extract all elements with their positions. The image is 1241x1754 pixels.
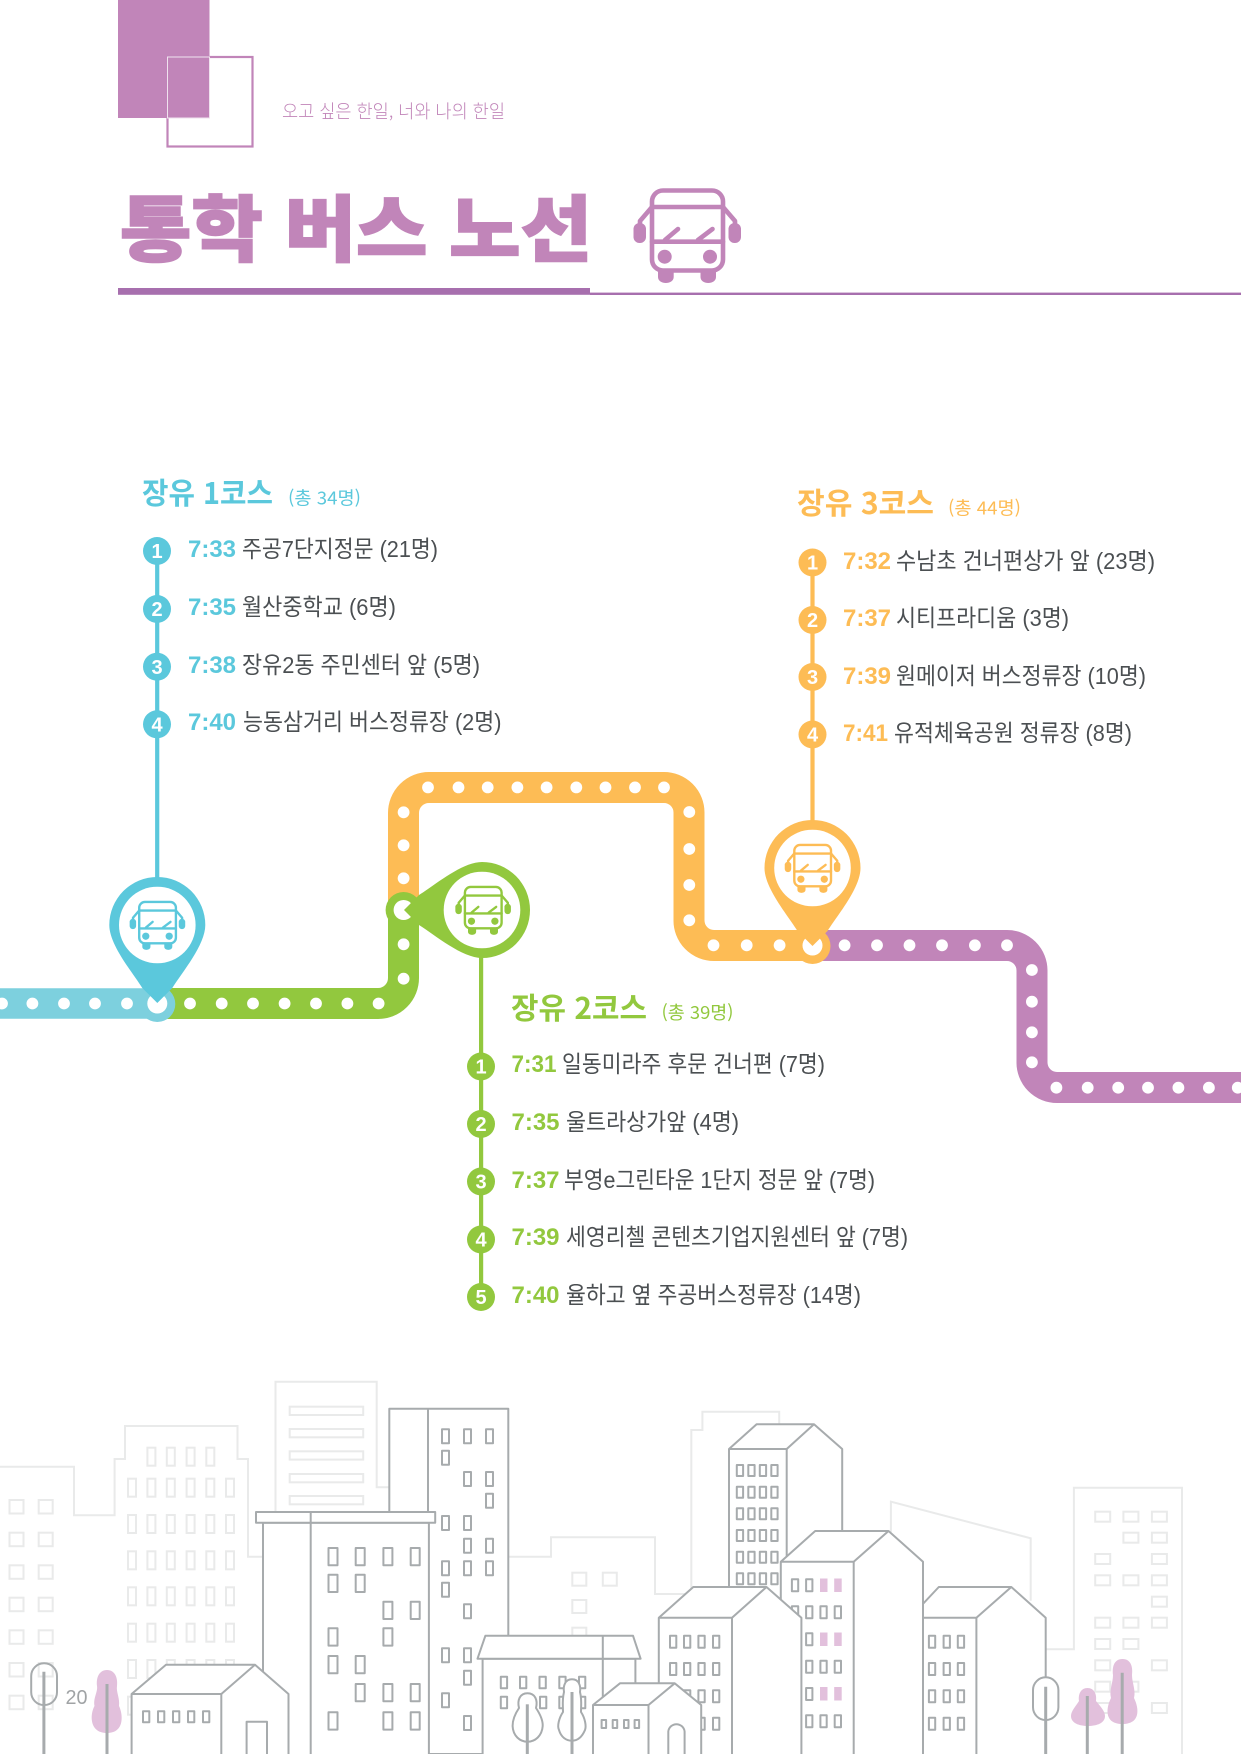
stop 2: 7:37 — [843, 605, 891, 632]
cityscape illustration — [0, 1382, 1182, 1754]
stop 3: 7:37 — [512, 1167, 560, 1194]
stop 4: 4 — [475, 1230, 487, 1252]
stop 3: 3 — [151, 657, 163, 679]
tree: outline right — [1033, 1677, 1058, 1754]
heading: course 1: (총 34명) — [288, 484, 361, 510]
stop 3 — [143, 652, 480, 681]
stop 1: 일동미라주 후문 건너편 (7명) — [562, 1051, 825, 1077]
stop 1: 1 — [151, 541, 163, 563]
tree: outline left — [31, 1663, 57, 1754]
low building in centre — [478, 1636, 641, 1754]
stop 3: 3 — [475, 1172, 487, 1194]
stop 3 — [798, 663, 1146, 691]
heading: course 1 — [142, 469, 361, 513]
small house centre — [593, 1683, 701, 1754]
stop 3: 원메이저 버스정류장 (10명) — [896, 663, 1146, 689]
stop 3: 7:38 — [188, 652, 236, 679]
stop 1: 수남초 건너편상가 앞 (23명) — [896, 548, 1155, 574]
front apartment building — [659, 1587, 801, 1754]
stop 2: 7:35 — [512, 1109, 560, 1136]
building with pink windows — [781, 1531, 923, 1754]
outlined trees centre — [513, 1679, 586, 1754]
route segment: purple course — [812, 939, 1241, 1094]
stop 1 — [467, 1051, 825, 1080]
stop 2: 월산중학교 (6명) — [242, 594, 396, 620]
stop 4: 4 — [151, 714, 163, 736]
stop 3 — [467, 1167, 875, 1196]
stop 3: 3 — [807, 667, 818, 689]
route segment: course 1 — [0, 998, 157, 1009]
heading: course 1: 장유 1코스 — [142, 469, 273, 513]
stop 1 — [143, 536, 438, 565]
stop 4 — [143, 709, 502, 738]
connector line course 1 — [155, 550, 159, 880]
stop 5: 7:40 — [512, 1282, 560, 1309]
stop 1 — [798, 548, 1155, 576]
right building — [910, 1587, 1046, 1754]
stop 2: 7:35 — [188, 594, 236, 621]
stop 5 — [467, 1282, 861, 1311]
stop 4: 7:41 — [843, 720, 888, 747]
subtitle: 오고 싶은 한일, 너와 나의 한일 — [282, 98, 505, 124]
route segment: course 2 — [157, 910, 410, 1009]
stop 5: 율하고 옆 주공버스정류장 (14명) — [566, 1282, 861, 1308]
map pin: course 2 — [386, 862, 530, 958]
stop 3: 장유2동 주민센터 앞 (5명) — [242, 652, 480, 678]
stop 3: 7:39 — [843, 663, 891, 690]
heading: course 3: 장유 3코스 — [797, 479, 934, 523]
panel: course 3 stops — [797, 479, 1155, 824]
page number: 20 — [66, 1687, 88, 1709]
header decoration squares — [118, 0, 252, 146]
trees: pink right — [1071, 1659, 1137, 1754]
stop 1: 1 — [807, 552, 818, 574]
stop 1: 주공7단지정문 (21명) — [242, 536, 438, 562]
stop 5: 5 — [475, 1287, 487, 1309]
stop 2 — [467, 1109, 739, 1138]
tree: pink left — [92, 1670, 122, 1754]
heading: course 3 — [797, 479, 1021, 523]
stop 1: 7:31 — [512, 1051, 556, 1078]
tower building — [389, 1409, 508, 1754]
title underline — [118, 288, 1241, 295]
stop 4: 능동삼거리 버스정류장 (2명) — [243, 709, 502, 735]
panel: course 1 stops — [142, 469, 502, 880]
route map — [0, 782, 1241, 1094]
stop 2: 2 — [807, 610, 818, 632]
stop 2: 시티프라디움 (3명) — [896, 605, 1069, 631]
stop 3: 부영e그린타운 1단지 정문 앞 (7명) — [564, 1167, 875, 1193]
stop 4: 7:39 — [512, 1224, 560, 1251]
stop 2: 2 — [151, 599, 163, 621]
map pin: course 1 — [109, 877, 205, 1022]
heading: course 3: (총 44명) — [948, 494, 1021, 520]
stop 1: 7:33 — [188, 536, 236, 563]
icon: title bus — [634, 190, 741, 283]
heading: course 2 — [511, 984, 734, 1028]
tall building top centre — [729, 1424, 842, 1640]
map pin: course 3 — [764, 820, 860, 964]
heading: course 2: 장유 2코스 — [511, 984, 647, 1028]
background light buildings — [0, 1382, 1182, 1754]
title: 통학 버스 노선 — [120, 172, 592, 276]
mid-rise building with flat roof — [256, 1512, 435, 1754]
connector line course 3 — [810, 562, 815, 824]
heading: course 2: (총 39명) — [662, 999, 734, 1025]
stop 1: 1 — [475, 1056, 487, 1078]
stop 2: 2 — [475, 1114, 487, 1136]
house at bottom left — [132, 1665, 288, 1754]
stop 4: 7:40 — [188, 709, 236, 736]
stop 4: 4 — [807, 724, 819, 746]
stop 2 — [798, 605, 1069, 634]
stop 1: 7:32 — [843, 548, 891, 575]
connector line course 2 — [479, 955, 483, 1297]
stop 2 — [143, 594, 396, 623]
route segment: course 3 — [398, 782, 812, 951]
stop 4: 유적체육공원 정류장 (8명) — [894, 720, 1132, 746]
stop 4: 세영리첼 콘텐츠기업지원센터 앞 (7명) — [566, 1224, 908, 1250]
stop 4 — [798, 720, 1132, 748]
stop 2: 울트라상가앞 (4명) — [566, 1109, 739, 1135]
panel: course 2 stops — [467, 955, 908, 1311]
stop 4 — [467, 1224, 908, 1254]
